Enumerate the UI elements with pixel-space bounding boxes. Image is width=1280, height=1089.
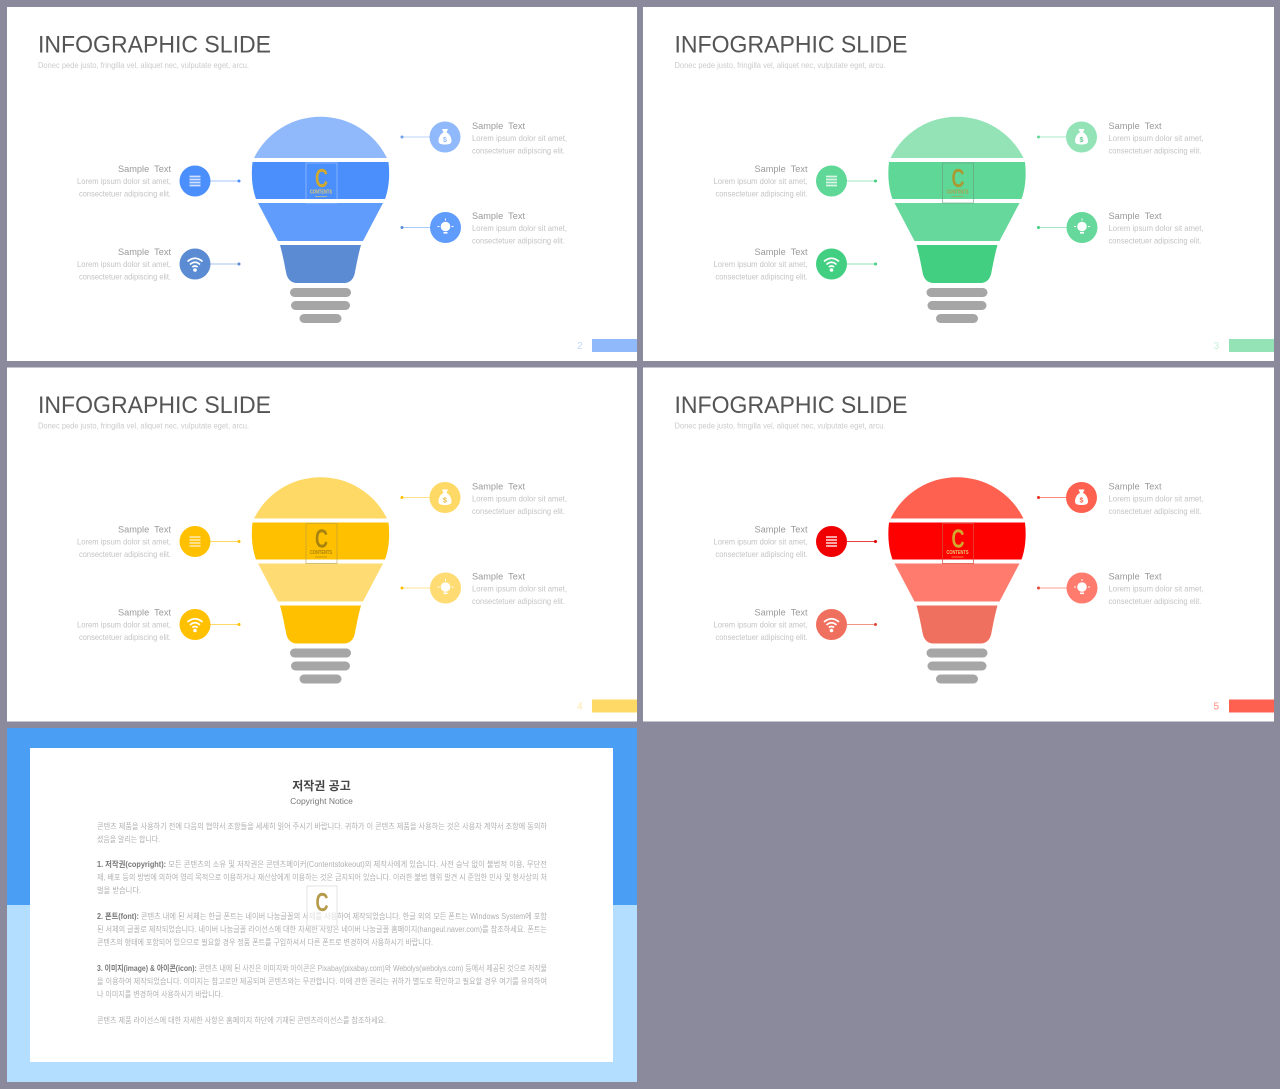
page tab bbox=[592, 339, 637, 352]
callout: left top: consectetuer adipiscing elit. bbox=[79, 549, 171, 559]
callout: right top bbox=[1037, 121, 1204, 156]
watermark: CONTENTS bbox=[310, 190, 333, 196]
callout: right bottom: Lorem ipsum dolor sit amet, bbox=[472, 584, 567, 594]
icon: money bag bbox=[438, 129, 452, 144]
title: INFOGRAPHIC SLIDE bbox=[38, 32, 271, 58]
callout: right bottom bbox=[1037, 572, 1204, 606]
callout: left bottom: consectetuer adipiscing elit. bbox=[716, 272, 808, 282]
callout: left top: Lorem ipsum dolor sit amet, bbox=[714, 176, 808, 186]
callout: left bottom bbox=[77, 608, 240, 642]
callout: right bottom: Lorem ipsum dolor sit amet, bbox=[1108, 223, 1204, 233]
icon: wifi bbox=[824, 619, 839, 632]
page number: 4 bbox=[577, 702, 583, 712]
callout: right top bbox=[400, 482, 567, 516]
watermark: CONTENTS bbox=[310, 550, 333, 556]
icon: stack bbox=[190, 176, 200, 186]
notice section 3: 3. 이미지(image) & 아이콘(icon): 콘텐츠 내에 된 사진은 이미지와 아이콘은 Pixabay(pixabay.com)와 Webolys(webolys.com) 등에서 제공된 것으로 저작물 bbox=[97, 963, 547, 973]
icon: wifi bbox=[188, 619, 202, 632]
callout: right bottom: consectetuer adipiscing elit. bbox=[472, 236, 565, 246]
callout: right bottom: consectetuer adipiscing elit. bbox=[1108, 596, 1202, 606]
panel: blue bulb slide bbox=[7, 7, 637, 361]
callout: left top: Lorem ipsum dolor sit amet, bbox=[77, 176, 171, 186]
callout: left bottom: Sample Text bbox=[118, 247, 172, 257]
callout: right top: Sample Text bbox=[1108, 121, 1162, 131]
callout: left bottom: consectetuer adipiscing elit. bbox=[79, 272, 171, 282]
callout: left top: Sample Text bbox=[118, 524, 172, 534]
notice section 2: 2. 폰트(font): 콘텐츠 내에 된 서체는 한글 폰트는 네이버 나눔글꼴의 서체를 사용하여 제작되었습니다. 한글 외의 모든 폰트는 Windows System에 포함 bbox=[97, 911, 548, 921]
callout: right bottom: consectetuer adipiscing elit. bbox=[472, 596, 565, 606]
notice intro: 셨음을 알리는 합니다. bbox=[97, 834, 160, 844]
icon: money bag: $ bbox=[443, 498, 447, 504]
callout: right bottom: Sample Text bbox=[472, 211, 526, 221]
icon: wifi bbox=[188, 258, 202, 272]
callout: left top: Sample Text bbox=[754, 524, 808, 534]
watermark: C bbox=[315, 524, 328, 554]
page number: 5 bbox=[1214, 702, 1220, 712]
callout: right top: Lorem ipsum dolor sit amet, bbox=[1108, 494, 1204, 504]
callout: right top: Lorem ipsum dolor sit amet, bbox=[472, 494, 567, 504]
callout: left bottom bbox=[714, 608, 877, 642]
watermark bbox=[942, 163, 974, 203]
icon: stack bbox=[190, 537, 200, 546]
notice intro: 콘텐츠 제품을 사용하기 전에 다음의 협약서 조항들을 세세히 읽어 주시기 바랍니다. 귀하가 이 콘텐츠 제품을 사용하는 것은 사용자 계약서 조항에 동의하 bbox=[97, 821, 548, 831]
notice subheading: Copyright Notice bbox=[290, 796, 353, 806]
icon: money bag bbox=[1075, 129, 1088, 144]
callout: right bottom: Lorem ipsum dolor sit amet, bbox=[1108, 584, 1204, 594]
callout: right top: consectetuer adipiscing elit. bbox=[472, 506, 565, 516]
callout: left top: Lorem ipsum dolor sit amet, bbox=[77, 536, 171, 546]
icon: light bulb bbox=[438, 579, 454, 594]
callout: left bottom: Sample Text bbox=[118, 608, 172, 618]
callout: right top: Lorem ipsum dolor sit amet, bbox=[1108, 133, 1204, 143]
icon: light bulb bbox=[1074, 218, 1090, 234]
callout: left bottom: Lorem ipsum dolor sit amet, bbox=[77, 259, 171, 269]
subtitle: Donec pede justo, fringilla vel, aliquet nec, vulputate eget, arcu. bbox=[38, 422, 249, 430]
notice section 1: 재, 배포 등의 방법에 의하여 영리 목적으로 이용하거나 재산상에게 이용하는 것은 금지되어 있습니다. 이러한 불법 행위 발견 시 준엄한 민사 및 형사상의 처 bbox=[97, 872, 547, 882]
watermark bbox=[307, 886, 337, 926]
callout: left top: consectetuer adipiscing elit. bbox=[716, 188, 808, 198]
notice section 1 bbox=[97, 859, 547, 895]
panel: red bulb slide bbox=[643, 368, 1274, 722]
callout: right top: consectetuer adipiscing elit. bbox=[1108, 506, 1202, 516]
callout: left bottom: consectetuer adipiscing elit. bbox=[79, 632, 171, 642]
callout: left bottom: Lorem ipsum dolor sit amet, bbox=[714, 259, 808, 269]
watermark: CONTENTS bbox=[946, 550, 969, 556]
watermark: C bbox=[315, 163, 328, 193]
page number: 3 bbox=[1214, 341, 1220, 352]
callout: left top bbox=[77, 524, 240, 559]
callout: right top bbox=[1037, 482, 1204, 516]
callout: right top: consectetuer adipiscing elit. bbox=[1108, 146, 1202, 156]
bulb chart bbox=[252, 117, 389, 323]
title: INFOGRAPHIC SLIDE bbox=[674, 32, 908, 58]
notice section 1: 벌을 받습니다. bbox=[97, 885, 141, 895]
callout: right top: Sample Text bbox=[472, 482, 526, 492]
notice section 3: 나 이미지를 변경하여 사용하시기 바랍니다. bbox=[97, 989, 223, 999]
subtitle: Donec pede justo, fringilla vel, aliquet nec, vulputate eget, arcu. bbox=[674, 422, 886, 430]
callout: right bottom: Sample Text bbox=[472, 572, 526, 582]
icon: money bag: $ bbox=[1080, 137, 1084, 144]
subtitle: Donec pede justo, fringilla vel, aliquet nec, vulputate eget, arcu. bbox=[674, 61, 886, 70]
callout: right top: Lorem ipsum dolor sit amet, bbox=[472, 133, 567, 143]
page tab bbox=[592, 700, 637, 712]
notice heading: 저작권 공고 bbox=[292, 778, 351, 793]
callout: left bottom bbox=[714, 247, 877, 282]
callout: left top: Sample Text bbox=[118, 164, 172, 174]
callout: left top: Lorem ipsum dolor sit amet, bbox=[714, 536, 808, 546]
page number: 2 bbox=[577, 341, 583, 352]
page tab bbox=[1229, 700, 1274, 712]
icon: money bag bbox=[1075, 490, 1088, 505]
callout: right top: Sample Text bbox=[1108, 482, 1162, 492]
notice section 2 bbox=[97, 911, 548, 947]
callout: left bottom: Sample Text bbox=[754, 608, 808, 618]
callout: left bottom: consectetuer adipiscing elit. bbox=[716, 632, 808, 642]
title: INFOGRAPHIC SLIDE bbox=[38, 392, 271, 419]
panel: copyright notice slide bbox=[7, 728, 637, 1082]
callout: left top bbox=[77, 164, 240, 198]
notice closing: 콘텐츠 제품 라이선스에 대한 자세한 사항은 홈페이지 하단에 기재된 콘텐츠라이선스를 참조하세요. bbox=[97, 1015, 386, 1025]
watermark: C bbox=[952, 163, 965, 193]
callout: left bottom bbox=[77, 247, 240, 282]
notice section 2: 된 서체의 글꼴로 제작되었습니다. 네이버 나눔글꼴 라이선스에 대한 자세한 사항은 네이버 나눔글꼴 홈페이지(hangeul.naver.com)를 참조하세요. 폰트는 bbox=[97, 924, 547, 934]
icon: light bulb bbox=[1074, 579, 1090, 594]
callout: left top: Sample Text bbox=[754, 164, 808, 174]
callout: left bottom: Lorem ipsum dolor sit amet, bbox=[77, 620, 171, 630]
callout: right bottom: Sample Text bbox=[1108, 211, 1162, 221]
callout: left bottom: Sample Text bbox=[754, 247, 808, 257]
panel: yellow bulb slide bbox=[7, 368, 637, 722]
icon: money bag: $ bbox=[443, 137, 447, 144]
callout: left top: consectetuer adipiscing elit. bbox=[716, 549, 808, 559]
bulb chart bbox=[888, 117, 1026, 323]
callout: left top: consectetuer adipiscing elit. bbox=[79, 188, 171, 198]
page tab bbox=[1229, 339, 1274, 352]
callout: right bottom: Lorem ipsum dolor sit amet, bbox=[472, 223, 567, 233]
icon: stack bbox=[826, 537, 837, 546]
subtitle: Donec pede justo, fringilla vel, aliquet nec, vulputate eget, arcu. bbox=[38, 61, 249, 70]
watermark: CONTENTS bbox=[946, 190, 969, 196]
callout: right bottom: Sample Text bbox=[1108, 572, 1162, 582]
callout: right bottom bbox=[1037, 211, 1204, 246]
icon: money bag bbox=[438, 490, 452, 505]
notice section 2: 콘텐츠의 형태에 포함되어 있으므로 필요할 경우 정품 폰트를 구입하셔서 다른 폰트로 변경하여 사용하시기 바랍니다. bbox=[97, 937, 433, 947]
callout: left top bbox=[714, 524, 877, 559]
watermark: C bbox=[316, 887, 329, 917]
callout: right bottom bbox=[400, 211, 567, 246]
icon: stack bbox=[826, 176, 837, 186]
callout: right bottom: consectetuer adipiscing elit. bbox=[1108, 236, 1202, 246]
notice intro bbox=[97, 821, 548, 844]
panel: green bulb slide bbox=[643, 7, 1274, 361]
callout: left bottom: Lorem ipsum dolor sit amet, bbox=[714, 620, 808, 630]
notice section 3: 을 이용하여 제작되었습니다. 이미지는 참고로만 제공되며 콘텐츠와는 무관합니다. 이에 관한 권리는 귀하가 별도로 확인하고 필요할 경우 여기를 유의하여 bbox=[97, 976, 547, 986]
watermark bbox=[306, 163, 337, 203]
icon: wifi bbox=[824, 258, 839, 272]
title: INFOGRAPHIC SLIDE bbox=[674, 392, 908, 419]
icon: light bulb bbox=[438, 218, 454, 234]
callout: right top: consectetuer adipiscing elit. bbox=[472, 146, 565, 156]
bulb chart bbox=[888, 477, 1026, 684]
callout: right top bbox=[400, 121, 567, 156]
watermark bbox=[942, 524, 974, 564]
icon: money bag: $ bbox=[1080, 498, 1084, 504]
notice section 3 bbox=[97, 963, 547, 999]
watermark: C bbox=[952, 524, 965, 554]
callout: right bottom bbox=[400, 572, 567, 606]
bulb chart bbox=[252, 477, 389, 684]
notice section 1: 1. 저작권(copyright): 모든 콘텐츠의 소유 및 저작권은 콘텐츠메이커(Contentstokeout)의 제작사에게 있습니다. 사전 승낙 없이 불법적 이용, 무단전 bbox=[97, 859, 547, 869]
watermark bbox=[306, 524, 337, 564]
callout: left top bbox=[714, 164, 877, 198]
callout: right top: Sample Text bbox=[472, 121, 526, 131]
